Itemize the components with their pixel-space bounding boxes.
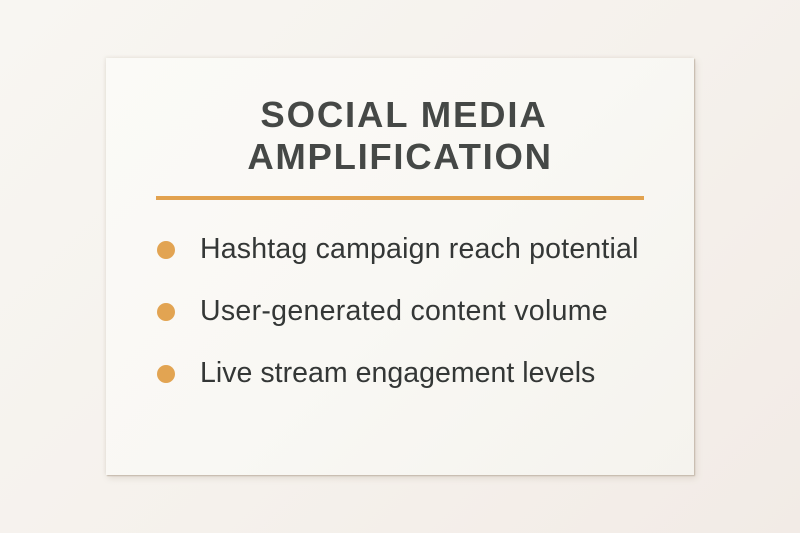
title: AMPLIFICATION [247,136,553,177]
text: bullet 3: Live stream engagement levels [200,357,595,389]
title [247,94,553,177]
panel: card [106,58,694,475]
text: bullet 2: User-generated content volume [200,295,608,327]
icon: bullet 2 [157,303,175,321]
heading rule [156,196,644,200]
title: SOCIAL MEDIA [260,94,548,135]
icon: bullet 1 [157,241,175,259]
icon: bullet 3 [157,365,175,383]
text: bullet 1: Hashtag campaign reach potential [200,233,639,265]
